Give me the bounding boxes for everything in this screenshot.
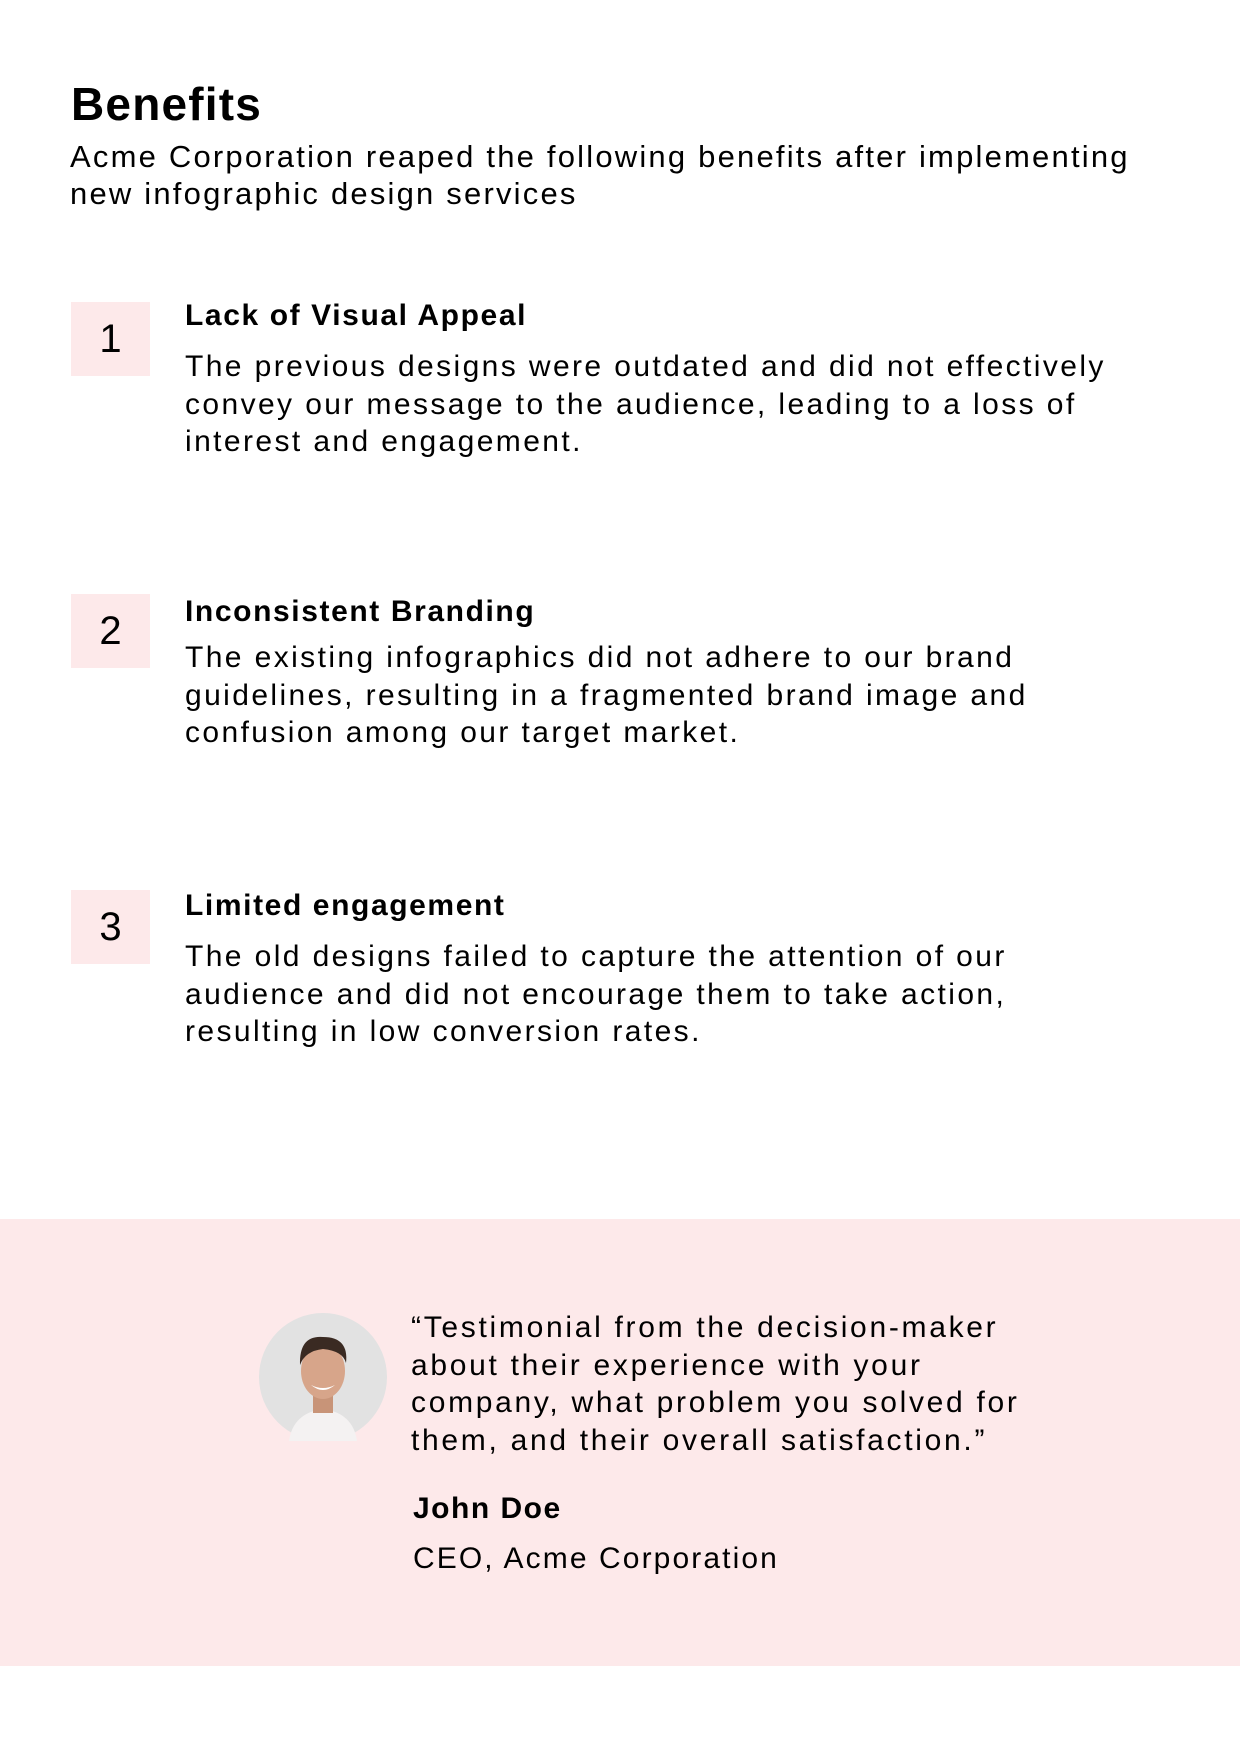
name: John Doe (413, 1492, 562, 1525)
body 3: audience and did not encourage them to take action, (185, 978, 1006, 1010)
quote (411, 1311, 1020, 1456)
subtitle: Acme Corporation reaped the following benefits after implementing (70, 139, 1130, 174)
body 2: guidelines, resulting in a fragmented brand image and (185, 678, 1028, 712)
body 1 (185, 350, 1106, 458)
heading 2: Inconsistent Branding (185, 595, 535, 628)
number box 1 (71, 302, 150, 376)
title: Benefits (71, 78, 262, 130)
number box 2 (71, 594, 150, 668)
quote: “Testimonial from the decision-maker (411, 1311, 998, 1344)
body 1: interest and engagement. (185, 425, 583, 458)
role: CEO, Acme Corporation (413, 1542, 779, 1575)
body 3 (185, 940, 1007, 1048)
number box 2: 2 (99, 608, 122, 652)
subtitle: new infographic design services (70, 176, 578, 211)
heading 3: Limited engagement (185, 889, 506, 922)
number box 3 (71, 890, 150, 964)
body 2: confusion among our target market. (185, 716, 740, 749)
body 1: convey our message to the audience, leading to a loss of (185, 388, 1077, 420)
number box 1: 1 (99, 316, 122, 360)
body 3: The old designs failed to capture the attention of our (185, 940, 1007, 973)
item 1 (71, 299, 1106, 458)
quote: them, and their overall satisfaction.” (411, 1424, 987, 1456)
heading 1: Lack of Visual Appeal (185, 299, 527, 332)
subtitle (70, 139, 1130, 211)
panel: testimonial (0, 1219, 1240, 1666)
icon: portrait photo (259, 1313, 387, 1441)
body 3: resulting in low conversion rates. (185, 1015, 702, 1048)
quote: company, what problem you solved for (411, 1386, 1020, 1419)
number box 3: 3 (99, 904, 122, 948)
quote: about their experience with your (411, 1348, 923, 1382)
body 2: The existing infographics did not adhere to our brand (185, 641, 1014, 674)
item 3 (71, 889, 1007, 1048)
item 2 (71, 594, 1028, 749)
body 1: The previous designs were outdated and did not effectively (185, 350, 1106, 383)
body 2 (185, 641, 1028, 749)
